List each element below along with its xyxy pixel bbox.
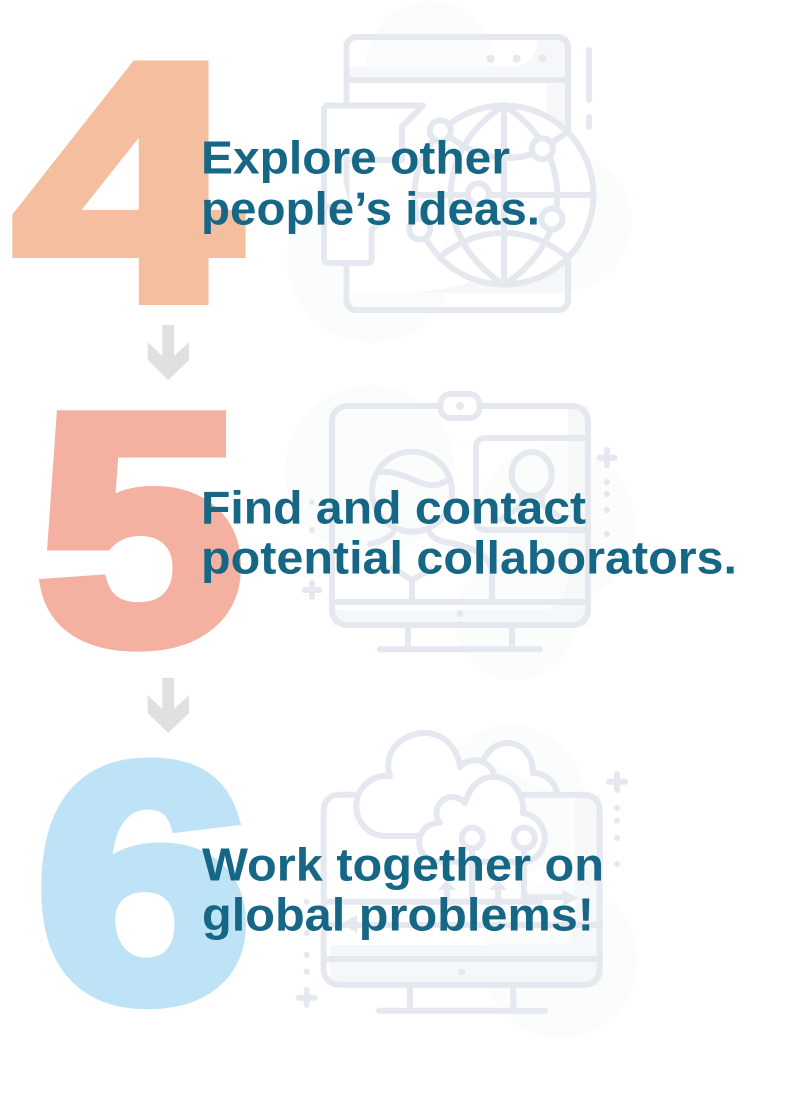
- icon: browser window and globe: [287, 1, 632, 343]
- heading: step 4: Explore other: [201, 132, 510, 184]
- icon: cloud monitor: [299, 725, 638, 1038]
- number 5: 5: [37, 348, 243, 711]
- icon: video call monitor: [285, 385, 635, 680]
- number 4: 4: [15, 0, 242, 369]
- heading: step 5: Find and contact: [201, 482, 586, 534]
- heading: step 4: [201, 132, 540, 234]
- heading: step 6: [202, 838, 604, 940]
- heading: step 6: global problems!: [202, 888, 594, 940]
- heading: step 4: people’s ideas.: [201, 182, 540, 234]
- number 6: 6: [36, 697, 251, 1069]
- heading: step 6: Work together on: [202, 838, 604, 890]
- arrow: 4 to 5: [148, 325, 189, 380]
- heading: step 5: [201, 482, 737, 584]
- arrow: 5 to 6: [148, 678, 189, 733]
- heading: step 5: potential collaborators.: [201, 532, 737, 584]
